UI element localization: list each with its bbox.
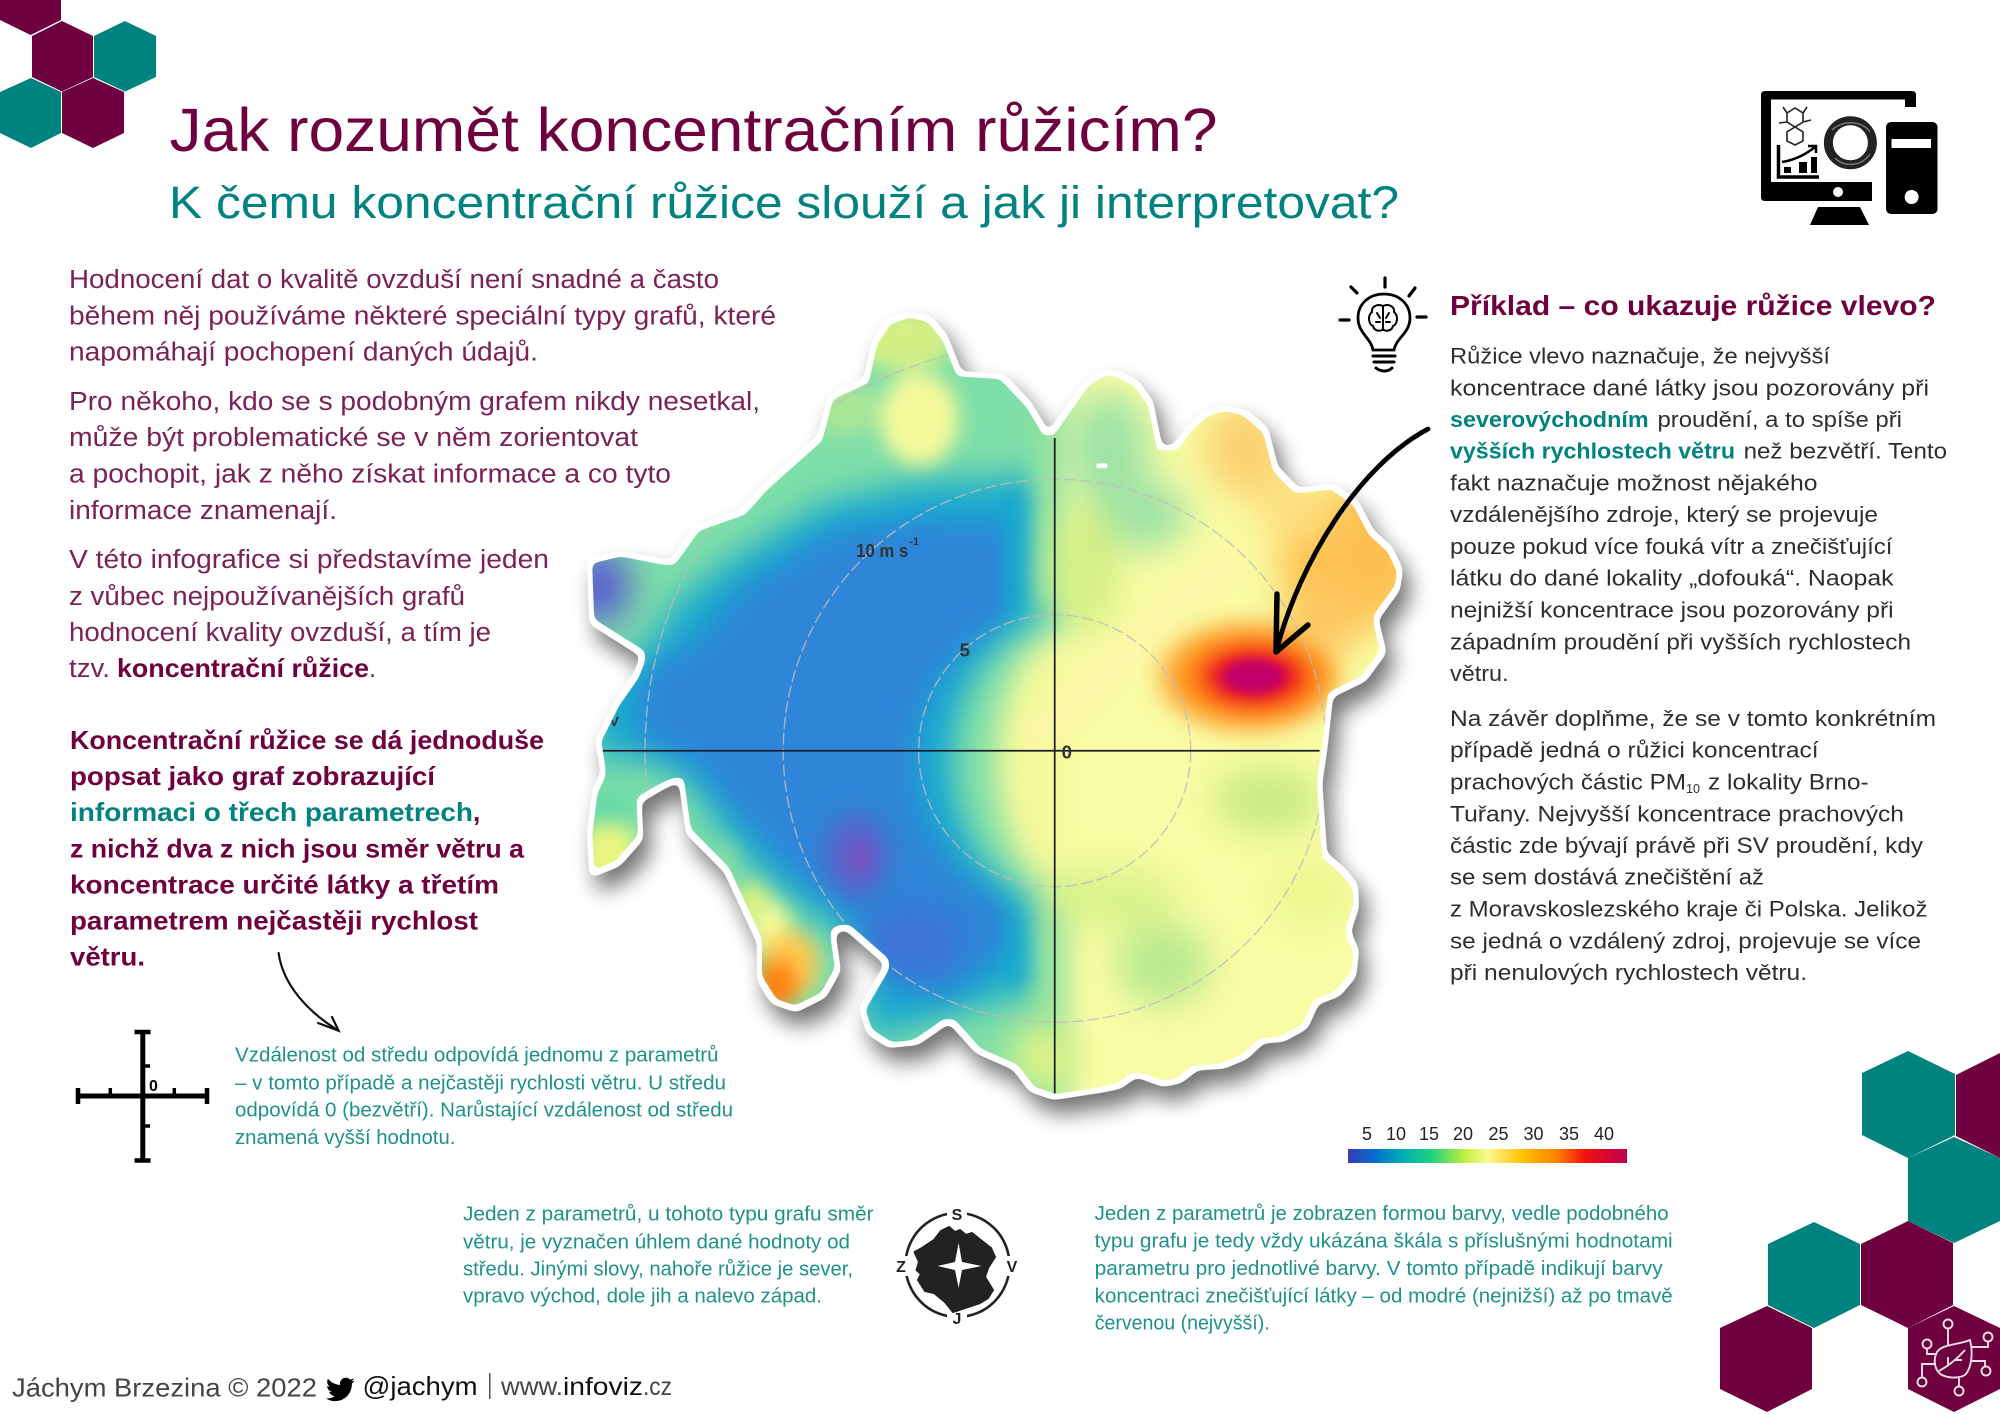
example paragraph 1: severovýchodním [1450, 407, 1649, 432]
example paragraph 2: při nenulových rychlostech větru. [1450, 960, 1807, 985]
footer credits [12, 1371, 672, 1403]
caption: distance from centre [235, 1045, 733, 1149]
chart axes [598, 438, 1320, 1094]
icon: compass rose: J [953, 1311, 961, 1328]
caption: wind direction: Jeden z parametrů, u tohoto typu grafu směr [463, 1204, 874, 1226]
paragraph 1 [69, 266, 776, 367]
arrow: to the hot spot [1276, 429, 1428, 652]
highlighted definition [70, 725, 544, 972]
highlighted definition: z nichž dva z nich jsou směr větru a [70, 833, 525, 863]
caption: distance from centre: znamená vyšší hodnotu. [235, 1127, 455, 1149]
caption: colour parameter: koncentraci znečišťující látky – od modré (nejnižší) až po tmavě [1095, 1285, 1673, 1307]
example paragraph 2: se jedná o vzdálený zdroj, projevuje se více [1450, 928, 1921, 953]
example paragraph 2: se sem dostává znečištění až [1450, 865, 1764, 890]
title: Jak rozumět koncentračním růžicím? [170, 96, 1218, 164]
legend: colour scale: 40 [1594, 1124, 1614, 1144]
example paragraph 1: větru. [1450, 661, 1509, 686]
paragraph 3: V této infografice si představíme jeden [69, 546, 549, 574]
caption: wind direction [463, 1204, 874, 1308]
example paragraph 2: z Moravskoslezského kraje či Polska. Jelikož [1450, 897, 1928, 922]
example paragraph 1: vzdálenějšího zdroje, který se projevuje [1450, 502, 1878, 527]
footer credits: infoviz [563, 1373, 643, 1401]
blue to yellow transition bands [1002, 527, 1037, 990]
radial grid circles [644, 354, 1325, 1023]
example paragraph 1: pouze pokud více fouká vítr a znečišťující [1450, 534, 1893, 559]
paragraph 2: a pochopit, jak z něho získat informace a co tyto [69, 461, 671, 489]
chart axis labels [610, 536, 1072, 762]
footer credits: Jáchym Brzezina © 2022 [12, 1373, 317, 1403]
example paragraph 2: Na závěr doplňme, že se v tomto konkrétním [1450, 706, 1936, 731]
caption: colour parameter: Jeden z parametrů je zobrazen formou barvy, vedle podobného [1095, 1203, 1669, 1225]
chart axis labels: -1 [909, 536, 919, 548]
caption: distance from centre: – v tomto případě a nejčastěji rychlosti větru. U středu [235, 1072, 726, 1094]
highlighted definition: , [473, 797, 480, 827]
legend: colour scale: 25 [1488, 1124, 1509, 1144]
icon: compass rose: S [952, 1207, 963, 1224]
caption: colour parameter [1095, 1203, 1673, 1334]
caption: colour parameter: typu grafu je tedy vždy ukázána škála s příslušnými hodnotami [1095, 1230, 1673, 1252]
footer credits: www. [500, 1373, 563, 1401]
caption: wind direction: větru, je vyznačen úhlem dané hodnoty od [463, 1231, 850, 1253]
example paragraph 1: nejnižší koncentrace jsou pozorovány při [1450, 598, 1894, 623]
example paragraph 2: částic zde bývají právě při SV proudění, kdy [1450, 833, 1924, 858]
legend: colour scale: 35 [1559, 1124, 1579, 1144]
example paragraph 2: z lokality Brno- [1708, 770, 1869, 795]
paragraph 1: napomáhají pochopení daných údajů. [69, 339, 538, 367]
paragraph 3: z vůbec nejpoužívanějších grafů [69, 583, 465, 611]
paragraph 3 [69, 546, 549, 683]
paragraph 2: Pro někoho, kdo se s podobným grafem nikdy nesetkal, [69, 388, 760, 416]
example paragraph 2: prachových částic PM [1450, 770, 1686, 795]
paragraph 2 [69, 388, 760, 525]
paragraph 1: Hodnocení dat o kvalitě ovzduší není snadné a často [69, 266, 719, 294]
highlighted definition: parametrem nejčastěji rychlost [70, 906, 478, 936]
icon: compass rose: V [1007, 1259, 1018, 1276]
paragraph 3: hodnocení kvality ovzduší, a tím je [69, 619, 491, 647]
icon: compass rose: Z [896, 1259, 906, 1276]
paragraph 3: koncentrační růžice [117, 653, 369, 683]
icon: light bulb with brain [1340, 278, 1426, 371]
example paragraph 2 [1450, 706, 1936, 985]
legend: colour scale: 10 [1386, 1124, 1406, 1144]
paragraph 3: . [369, 655, 376, 683]
paragraph 2: může být problematické se v něm zorientovat [69, 424, 638, 452]
caption: colour parameter: parametru pro jednotlivé barvy. V tomto případě indikují barvy [1095, 1258, 1663, 1280]
chart axis labels: 10 m s [856, 540, 908, 561]
chart axis labels: 5 [960, 639, 970, 660]
caption: distance from centre: Vzdálenost od středu odpovídá jednomu z parametrů [235, 1045, 719, 1067]
chart axis labels: V [610, 714, 620, 730]
icon: radial axis: 0 [149, 1078, 158, 1095]
paragraph 3: tzv. [69, 655, 110, 683]
example paragraph 1 [1450, 343, 1947, 686]
paragraph 2: informace znamenají. [69, 497, 337, 525]
icon: radial axis [78, 1032, 207, 1160]
example heading: Příklad – co ukazuje růžice vlevo? [1450, 290, 1936, 321]
example paragraph 1: západním proudění při vyšších rychlostech [1450, 629, 1911, 654]
subtitle: K čemu koncentrační růžice slouží a jak ji interpretovat? [169, 177, 1399, 228]
legend: colour scale: 5 [1362, 1124, 1372, 1144]
example paragraph 1: Růžice vlevo naznačuje, že nejvyšší [1450, 343, 1831, 368]
panel: intro text [69, 266, 776, 683]
legend: colour scale: 30 [1523, 1124, 1544, 1144]
paragraph 1: během něj používáme některé speciální typy grafů, které [69, 302, 776, 330]
caption: wind direction: středu. Jinými slovy, nahoře růžice je sever, [463, 1259, 853, 1281]
example paragraph 1: proudění, a to spíše při [1658, 407, 1902, 432]
highlighted definition: větru. [70, 942, 145, 972]
panel: example explanation [1450, 290, 1947, 985]
example paragraph 2: případě jedná o růžici koncentrací [1450, 738, 1819, 763]
caption: wind direction: vpravo východ, dole jih a nalevo západ. [463, 1286, 822, 1308]
decorative hexagons top left [0, 0, 156, 148]
caption: colour parameter: červenou (nejvyšší). [1095, 1312, 1270, 1334]
example paragraph 1: fakt naznačuje možnost nějakého [1450, 470, 1818, 495]
icon: leaf with circuit [1918, 1320, 1992, 1396]
legend: colour scale: 15 [1419, 1124, 1439, 1144]
footer credits: .cz [643, 1373, 672, 1401]
example paragraph 1: látku do dané lokality „dofouká“. Naopak [1450, 566, 1894, 591]
legend: colour scale: 20 [1453, 1124, 1473, 1144]
example paragraph 1: než bezvětří. Tento [1744, 439, 1947, 464]
icon: twitter bird [326, 1378, 355, 1401]
highlighted definition: koncentrace určité látky a třetím [70, 869, 499, 899]
highlighted definition: Koncentrační růžice se dá jednoduše [70, 725, 544, 755]
footer credits: @jachym [362, 1371, 478, 1401]
chart axis labels: 0 [1062, 741, 1072, 762]
highlighted definition: informaci o třech parametrech [70, 797, 473, 827]
legend: colour scale [1348, 1124, 1627, 1163]
arrow: definition to radial axis caption [279, 953, 339, 1031]
example paragraph 2: 10 [1686, 781, 1700, 796]
example paragraph 1: vyšších rychlostech větru [1450, 439, 1735, 464]
decorative hexagons bottom right [1720, 1051, 2000, 1412]
heat map field [592, 318, 1396, 1094]
example paragraph 1: koncentrace dané látky jsou pozorovány při [1450, 375, 1929, 400]
chart shadow [598, 329, 1407, 1111]
caption: distance from centre: odpovídá 0 (bezvětří). Narůstající vzdálenost od středu [235, 1100, 733, 1122]
chart white sticker border [591, 315, 1399, 1096]
icon: compass rose [895, 1204, 1020, 1328]
chart: concentration rose [580, 312, 1424, 1128]
example paragraph 2: Tuřany. Nejvyšší koncentrace prachových [1450, 801, 1904, 826]
highlighted definition: popsat jako graf zobrazující [70, 761, 436, 791]
icon: computer with charts [1761, 91, 1938, 225]
